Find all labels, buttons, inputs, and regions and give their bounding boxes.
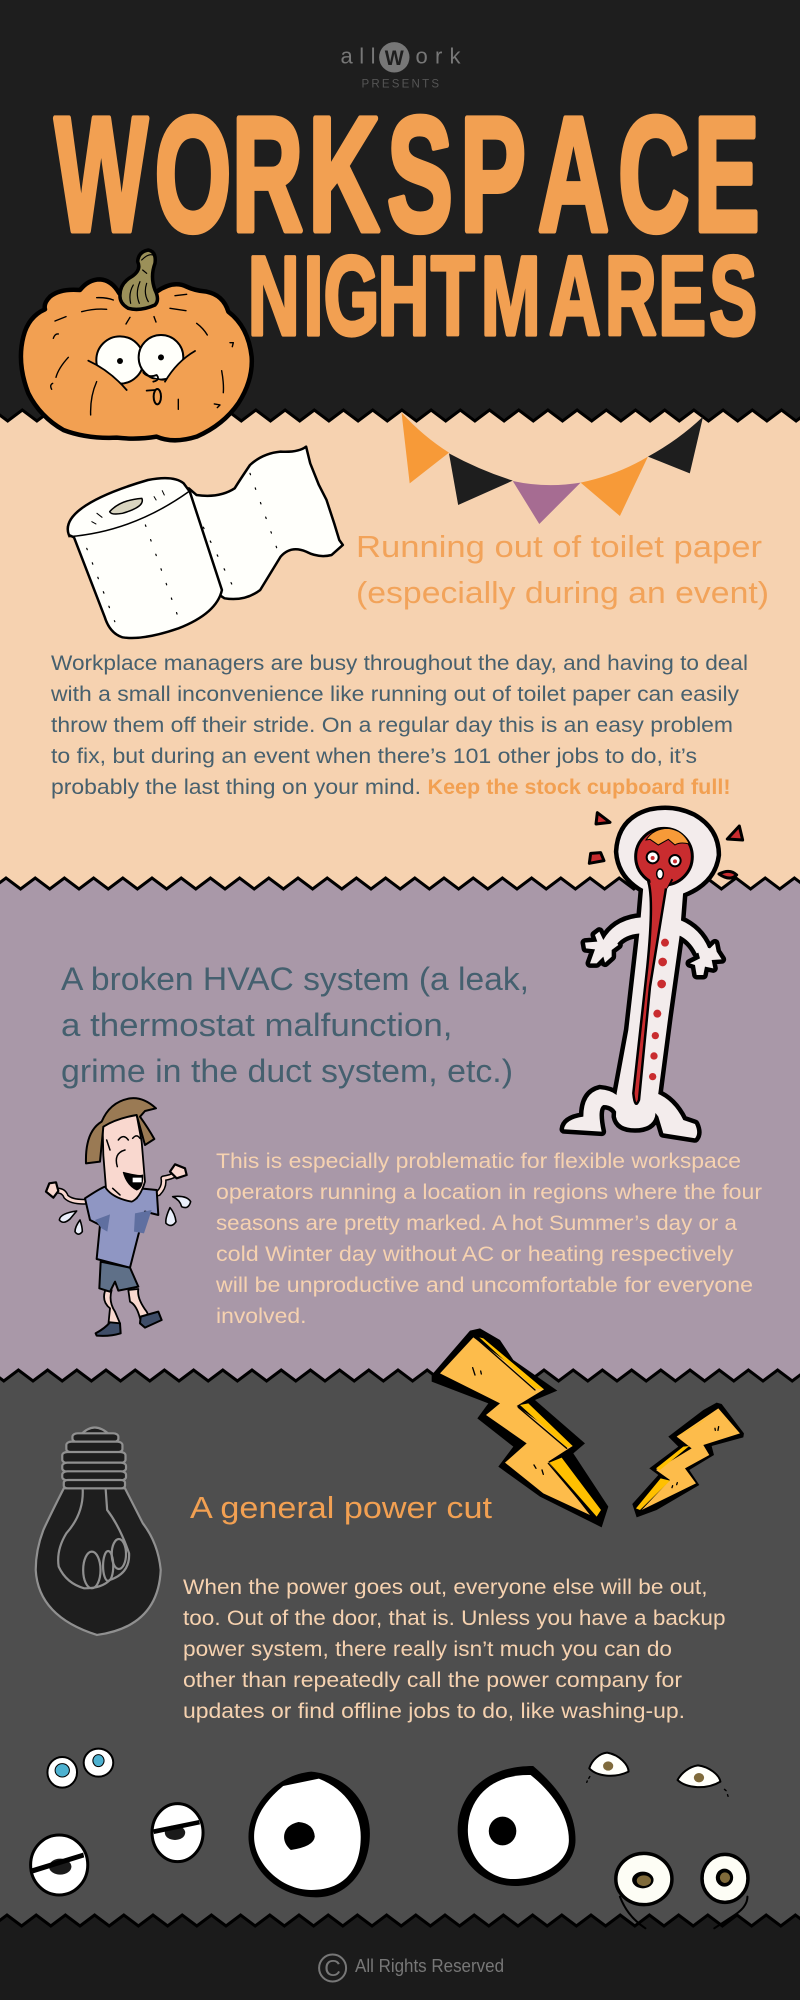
heading: hvac bbox=[61, 961, 529, 1089]
icon: copyright bbox=[319, 1954, 346, 1982]
heading: toilet paper: Running out of toilet paper bbox=[356, 529, 762, 564]
heading: power cut: A general power cut bbox=[190, 1490, 492, 1525]
logo: allwork: ork bbox=[416, 44, 462, 68]
body text: toilet paper: with a small inconvenience like running out of toilet paper can easily bbox=[50, 683, 740, 706]
body text: power cut: too. Out of the door, that is. Unless you have a backup bbox=[183, 1607, 726, 1630]
panel: toilet paper bbox=[0, 410, 800, 920]
panel: hvac bbox=[0, 810, 800, 1400]
eyes: small brown pair bbox=[587, 1753, 728, 1796]
presents label: PRESENTS bbox=[362, 78, 439, 90]
icon: small lightning bolt bbox=[632, 1403, 744, 1517]
heading: hvac: a thermostat malfunction, bbox=[61, 1007, 452, 1043]
heading: hvac: grime in the duct system, etc.) bbox=[61, 1053, 513, 1089]
body text: toilet paper: Keep the stock cupboard full! bbox=[428, 776, 730, 799]
body text: power cut: When the power goes out, everyone else will be out, bbox=[183, 1576, 708, 1599]
title: workspace: WORKSPACE bbox=[55, 83, 760, 266]
body text: hvac bbox=[215, 1150, 762, 1328]
panel: power cut bbox=[0, 1328, 800, 1950]
eyes: big pair bbox=[248, 1766, 576, 1897]
logo: allwork: W bbox=[385, 47, 404, 70]
body text: hvac: seasons are pretty marked. A hot Summer’s day or a bbox=[216, 1212, 737, 1235]
icon: sweating man bbox=[46, 1098, 191, 1336]
body text: power cut: other than repeatedly call the power company for bbox=[183, 1669, 682, 1692]
body text: toilet paper: Workplace managers are busy throughout the day, and having to deal bbox=[51, 652, 748, 675]
body text: power cut: power system, there really isn’t much you can do bbox=[183, 1638, 672, 1661]
panel: header bbox=[0, 0, 800, 430]
icon: big lightning bolt bbox=[432, 1328, 608, 1527]
body text: toilet paper: probably the last thing on your mind. bbox=[51, 776, 421, 799]
eyes: blue pair bbox=[47, 1749, 113, 1788]
logo: allwork: all bbox=[340, 44, 376, 68]
eyes: sleepy pair bbox=[31, 1804, 203, 1895]
heading: hvac: A broken HVAC system (a leak, bbox=[61, 961, 529, 997]
panel: footer bbox=[0, 1915, 800, 2000]
body text: power cut bbox=[183, 1576, 726, 1723]
heading: toilet paper bbox=[356, 529, 769, 610]
eyes: bottom right pair bbox=[616, 1853, 748, 1928]
footer text: All Rights Reserved bbox=[355, 1956, 504, 1976]
body text: hvac: cold Winter day without AC or heating respectively bbox=[216, 1243, 734, 1266]
body text: power cut: updates or find offline jobs to do, like washing-up. bbox=[183, 1700, 685, 1723]
body text: hvac: operators running a location in regions where the four bbox=[216, 1181, 762, 1204]
body text: toilet paper: throw them off their stride. On a regular day this is an easy problem bbox=[51, 714, 733, 737]
body text: toilet paper bbox=[50, 652, 748, 799]
title: nightmares: NIGHTMARES bbox=[248, 233, 757, 358]
body text: hvac: This is especially problematic for flexible workspace bbox=[216, 1150, 741, 1173]
eyes in the dark bbox=[31, 1749, 748, 1928]
icon: thermometer character bbox=[564, 810, 743, 1138]
icon: copyright: C bbox=[324, 1955, 341, 1981]
icon: light bulb bbox=[36, 1427, 161, 1635]
body text: toilet paper: to fix, but during an event when there’s 101 other jobs to do, it’s bbox=[51, 745, 697, 768]
icon: pumpkin bbox=[21, 250, 252, 440]
logo: allwork bbox=[340, 42, 462, 72]
icon: toilet paper roll bbox=[68, 447, 343, 638]
body text: hvac: involved. bbox=[216, 1305, 306, 1328]
bunting bbox=[402, 413, 703, 524]
body text: hvac: will be unproductive and uncomfortable for everyone bbox=[215, 1274, 753, 1297]
heading: toilet paper: (especially during an event) bbox=[356, 575, 769, 610]
